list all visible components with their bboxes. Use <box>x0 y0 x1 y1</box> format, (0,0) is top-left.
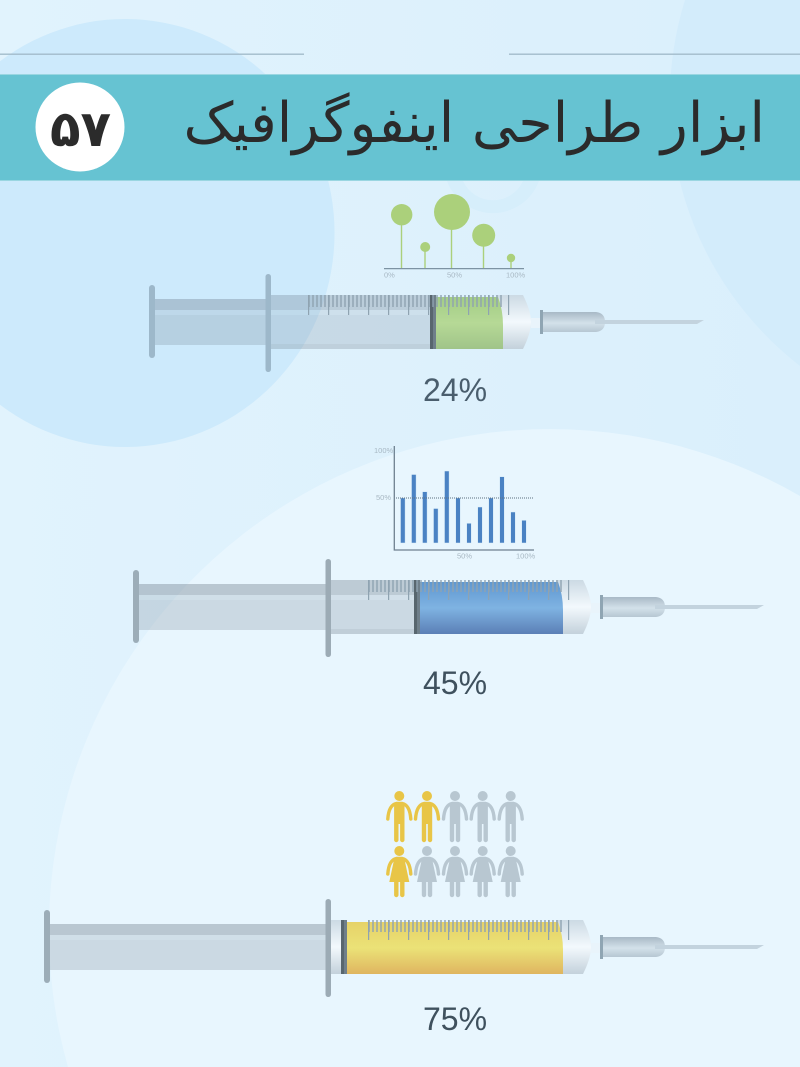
bubble chart: 50% <box>447 270 462 280</box>
bar chart: 50% <box>376 493 391 502</box>
liquid <box>347 922 563 974</box>
liquid <box>436 297 503 349</box>
plunger rod <box>50 924 326 970</box>
plunger head <box>414 580 420 634</box>
liquid <box>420 582 563 634</box>
scale ticks <box>308 301 510 305</box>
plunger head <box>341 920 347 974</box>
bar chart: 100% <box>516 552 536 560</box>
syringe 75% <box>44 899 764 997</box>
plunger rod <box>155 299 266 345</box>
value 75%: 75% <box>423 1001 487 1037</box>
needle and tip <box>496 295 704 349</box>
bar chart: 50% <box>457 552 472 560</box>
needle and tip <box>556 580 764 634</box>
barrel <box>133 559 414 657</box>
syringe 24% <box>149 274 704 372</box>
syringe 45% <box>133 559 764 657</box>
people pictogram <box>388 791 522 897</box>
bubble chart <box>384 194 526 280</box>
header band <box>0 74 800 181</box>
bar chart <box>374 446 536 560</box>
bar chart: 100% <box>374 446 394 455</box>
number badge: ۵۷ <box>50 100 111 158</box>
number badge <box>36 82 124 172</box>
scale ticks <box>368 586 570 590</box>
scale ticks <box>368 926 570 930</box>
bubble chart: 100% <box>506 270 526 280</box>
barrel <box>149 274 430 372</box>
plunger head <box>430 295 436 349</box>
plunger rod <box>139 584 326 630</box>
title: ابزار طراحی اینفوگرافیک <box>183 91 765 156</box>
value 24%: 24% <box>423 372 487 408</box>
bubble chart: 0% <box>384 270 395 280</box>
needle and tip <box>556 920 764 974</box>
value 45%: 45% <box>423 665 487 701</box>
barrel <box>44 899 341 997</box>
